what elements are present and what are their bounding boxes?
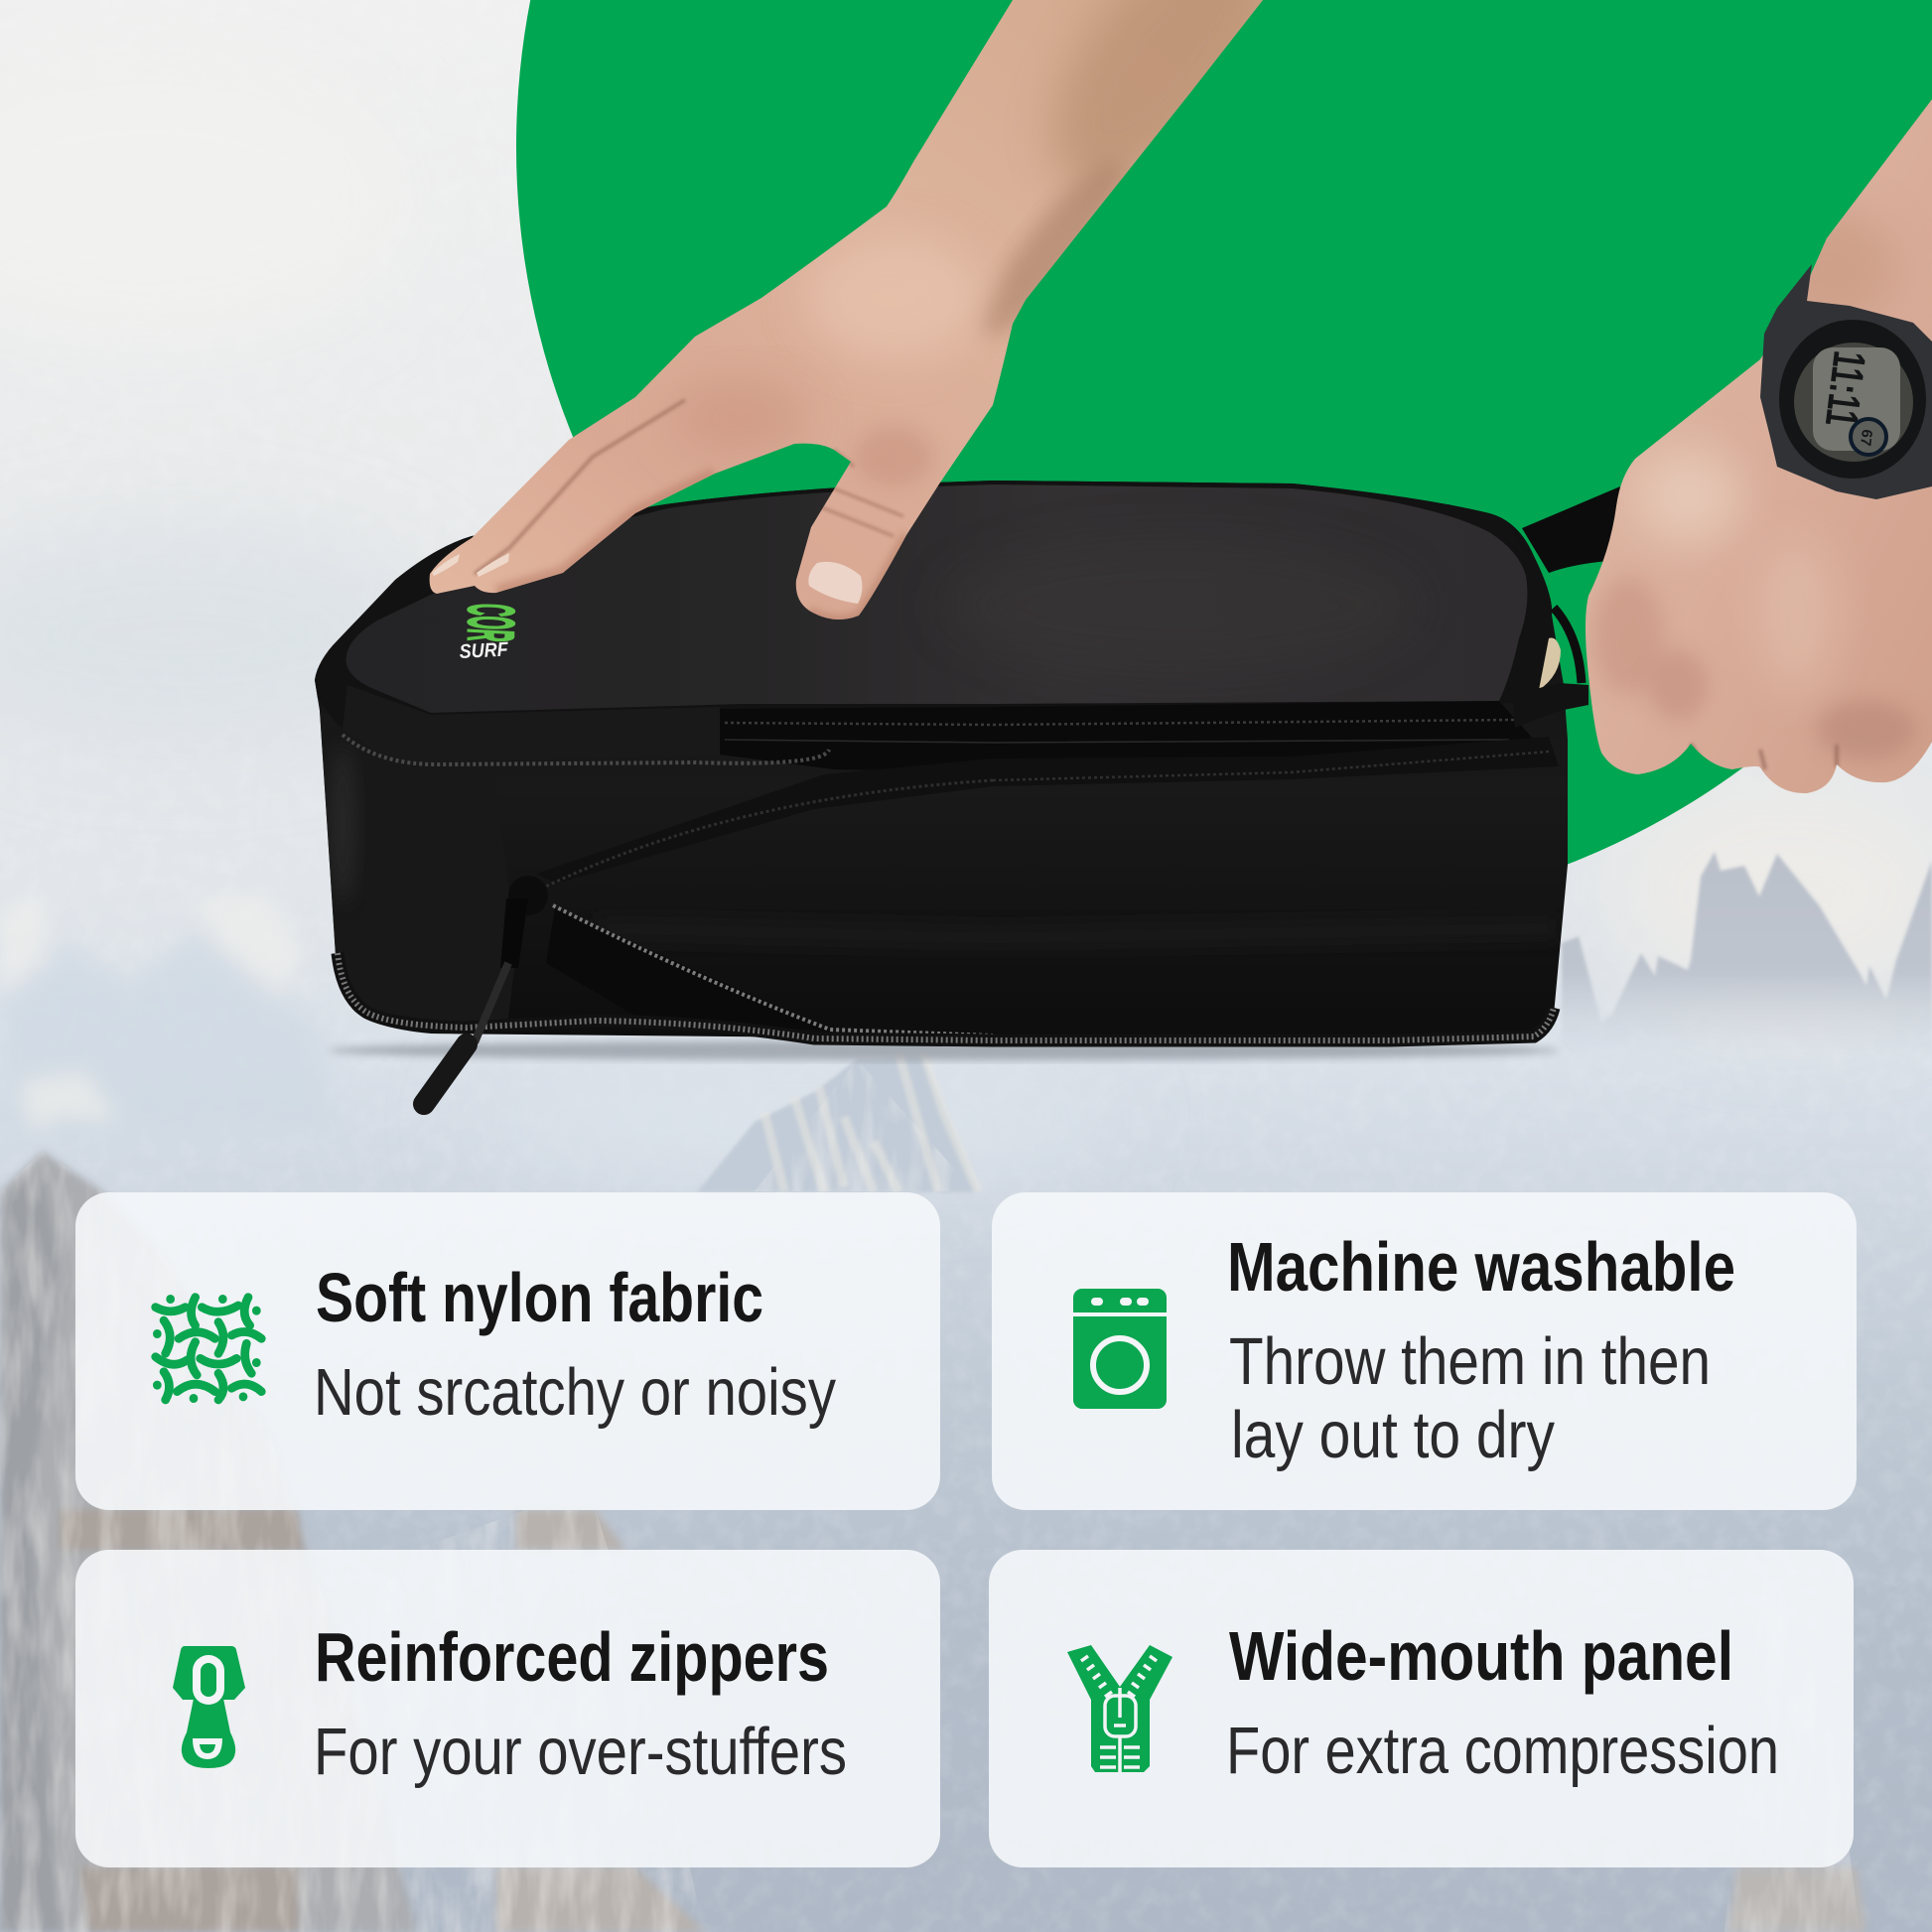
wrist watch: 67 [1857, 429, 1875, 447]
title: Wide-mouth panel [1229, 1617, 1733, 1695]
lid top [345, 484, 1527, 713]
panel: machine washable [992, 1192, 1857, 1510]
left end shading [320, 711, 516, 1033]
front panel fold [596, 918, 1559, 948]
wrist watch [1760, 264, 1932, 499]
zipper pull tab [424, 1044, 467, 1104]
icon: fabric weave [156, 1298, 261, 1400]
bag shadow [328, 1040, 1559, 1060]
lid light patch [943, 536, 1420, 675]
icon: zipper pull [173, 1646, 245, 1768]
subtitle line 2: lay out to dry [1231, 1398, 1555, 1472]
lower band [663, 737, 1558, 830]
zipper pull cord [475, 963, 508, 1042]
foreground rock [0, 1152, 1866, 1932]
green circle [516, 0, 1932, 917]
watch time: 11:11 [1816, 348, 1876, 430]
zipper slider [508, 876, 548, 915]
brand logo: SURF [459, 638, 509, 663]
title: Reinforced zippers [315, 1618, 829, 1696]
thumbnail [808, 562, 862, 604]
brand logo [455, 604, 528, 663]
far mountain spires right [1562, 852, 1932, 1062]
far mountains left [0, 894, 338, 1142]
subtitle: For extra compression [1226, 1714, 1779, 1788]
icon: washing machine [1073, 1289, 1167, 1409]
bottom zipper [338, 953, 1554, 1040]
panel: soft nylon fabric [75, 1192, 940, 1510]
icon: open zipper [1067, 1645, 1173, 1772]
v gusset [546, 908, 830, 1030]
subtitle: Not srcatchy or noisy [314, 1355, 836, 1430]
subtitle: For your over-stuffers [314, 1715, 847, 1789]
bag: compression packing cube: COR [455, 604, 528, 641]
zipper band [720, 701, 1534, 772]
title: Soft nylon fabric [316, 1259, 763, 1336]
rock texture [0, 1066, 1856, 1932]
title: Machine washable [1227, 1228, 1735, 1306]
top zipper edge [343, 735, 829, 764]
lid lip [343, 685, 720, 764]
bag: compression packing cube [308, 475, 1568, 1104]
finger nails [432, 554, 460, 576]
carry strap loop [1522, 486, 1620, 573]
subtitle line 1: Throw them in then [1229, 1324, 1711, 1399]
right hand [1586, 99, 1932, 793]
right zipper pull and filler [1512, 608, 1588, 728]
left hand [430, 0, 1311, 620]
panel: reinforced zippers [75, 1550, 940, 1867]
bag body [315, 481, 1568, 1042]
lid piping [315, 481, 1553, 698]
panel: wide-mouth panel [989, 1550, 1854, 1867]
mid ridge with snow streaks [697, 1052, 978, 1192]
